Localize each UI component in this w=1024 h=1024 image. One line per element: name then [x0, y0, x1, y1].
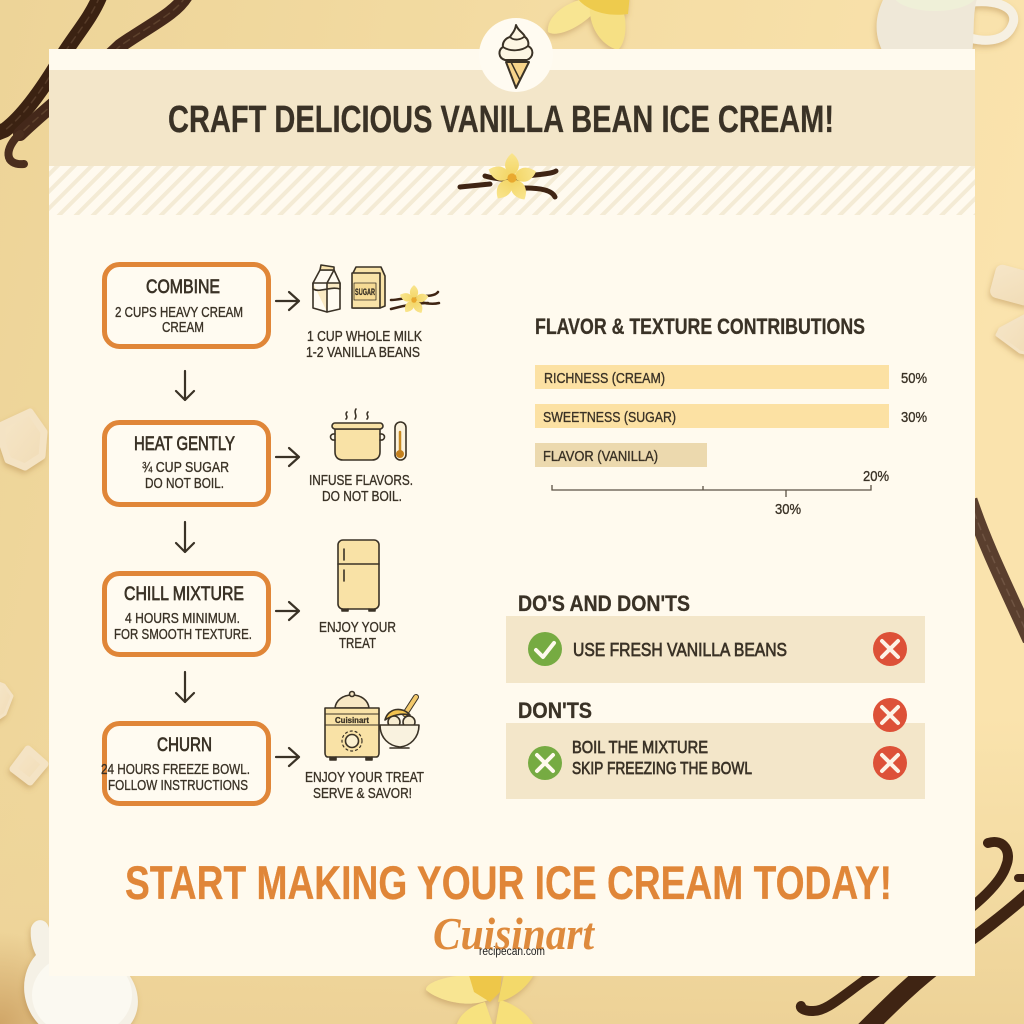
icon: green check: [528, 632, 562, 666]
decoration: milk jug top right: [877, 0, 1014, 54]
step 3 text: 4 HOURS MINIMUM.: [125, 610, 240, 627]
bar: sweetness: SWEETNESS (SUGAR): [543, 409, 676, 426]
arrow: step 1 to step 2: [176, 371, 194, 400]
step 3 result text: TREAT: [339, 635, 376, 652]
icon: ice cream cone badge: [479, 18, 553, 92]
decoration: sugar cubes right: [989, 263, 1024, 354]
icon: bowl of ice cream: [380, 697, 419, 748]
chart heading: FLAVOR & TEXTURE CONTRIBUTIONS: [535, 314, 865, 339]
step 1 heading: COMBINE: [146, 276, 220, 298]
decoration: vanilla flower bottom: [426, 970, 536, 1024]
icon: thermometer: [395, 422, 406, 460]
icon: sugar bag: SUGAR: [355, 287, 375, 297]
bar chart: flavor and texture contributions: [535, 314, 927, 518]
do's and don'ts: [506, 591, 925, 799]
bar: sweetness: [535, 404, 927, 428]
step 1 text: CREAM: [162, 319, 204, 336]
ingredients text: 1 CUP WHOLE MILK: [307, 328, 422, 345]
step 4 result text: ENJOY YOUR TREAT: [305, 769, 424, 786]
icon: refrigerator: [338, 540, 379, 611]
bar: flavor: FLAVOR (VANILLA): [543, 448, 658, 465]
decoration: vanilla bean right: [970, 500, 1024, 640]
bar: richness: RICHNESS (CREAM): [544, 370, 665, 387]
step 2 box: [104, 422, 268, 504]
step 3 text: FOR SMOOTH TEXTURE.: [114, 626, 252, 643]
step 2 result text: INFUSE FLAVORS.: [309, 472, 413, 489]
step 4 text: 24 HOURS FREEZE BOWL.: [101, 761, 250, 778]
do's heading: DO'S AND DON'TS: [518, 591, 690, 616]
decoration: sugar cubes left: [0, 412, 45, 782]
step 4 text: FOLLOW INSTRUCTIONS: [108, 777, 248, 794]
chart axis: 30%: [775, 501, 801, 518]
brand logo: Cuisinart: Cuisinart: [433, 908, 595, 959]
do's panel: [506, 616, 925, 683]
step 1 text: 2 CUPS HEAVY CREAM: [115, 304, 243, 321]
step 3 result text: ENJOY YOUR: [319, 619, 396, 636]
do's text: USE FRESH VANILLA BEANS: [573, 639, 787, 660]
icon: vanilla flower and beans divider: [460, 153, 556, 203]
arrow: step 1 to ingredients: [276, 292, 299, 310]
step 2 heading: HEAT GENTLY: [134, 433, 235, 455]
step 3 box: [104, 574, 268, 654]
decoration: vanilla flower top: [548, 0, 630, 50]
chart axis: 20%: [863, 468, 889, 485]
icon: red cross: [873, 746, 907, 780]
don'ts text: BOIL THE MIXTURE: [572, 737, 708, 757]
step 1: combine: [104, 264, 268, 346]
title band: [49, 70, 975, 166]
step 2 result text: DO NOT BOIL.: [322, 488, 402, 505]
arrow: step 4 to result: [276, 748, 299, 766]
icon: pot with steam: [330, 409, 384, 460]
icon: vanilla flower and beans: [391, 285, 439, 315]
step 2 text: ¾ CUP SUGAR: [142, 459, 229, 476]
title: CRAFT DELICIOUS VANILLA BEAN ICE CREAM!: [168, 99, 834, 141]
bar: richness: 50%: [901, 370, 927, 387]
icon: ice cream machine: [325, 692, 379, 760]
step 3 heading: CHILL MIXTURE: [124, 583, 244, 605]
step 2 text: DO NOT BOIL.: [145, 475, 224, 492]
step 4 heading: CHURN: [157, 734, 212, 756]
icon: milk carton: [313, 265, 340, 312]
step 2: heat gently: [104, 422, 268, 504]
hatched divider strip: [49, 166, 975, 215]
decoration: vanilla beans bottom right: [801, 842, 1024, 1024]
ingredients text: 1-2 VANILLA BEANS: [306, 344, 420, 361]
icon: red cross: [873, 698, 907, 732]
website credit: recipecan.com: [479, 946, 545, 958]
step 3: chill mixture: [104, 574, 268, 654]
decoration: milk bowl bottom left: [24, 920, 138, 1024]
icon: sugar bag: [352, 267, 385, 308]
arrow: step 2 to step 3: [176, 522, 194, 552]
arrow: step 3 to step 4: [176, 672, 194, 702]
don'ts heading: DON'TS: [518, 698, 592, 723]
icon: red cross: [873, 632, 907, 666]
bar: sweetness: 30%: [901, 409, 927, 426]
step 4 result text: SERVE & SAVOR!: [313, 785, 412, 802]
step 4: churn: [101, 724, 268, 804]
bar: richness: [535, 365, 927, 389]
arrow: step 2 to result: [276, 448, 299, 466]
don'ts text: SKIP FREEZING THE BOWL: [572, 758, 752, 778]
decoration: vanilla beans top left: [0, 0, 186, 164]
chart axis: [552, 468, 889, 518]
step 1 box: [104, 264, 268, 346]
icon: ice cream machine: Cuisinart: [335, 716, 369, 725]
icon: green cross: [528, 746, 562, 780]
don'ts panel: [506, 723, 925, 799]
arrow: step 3 to result: [276, 602, 299, 620]
step 4 box: [104, 724, 268, 804]
bar: flavor: [535, 443, 707, 467]
